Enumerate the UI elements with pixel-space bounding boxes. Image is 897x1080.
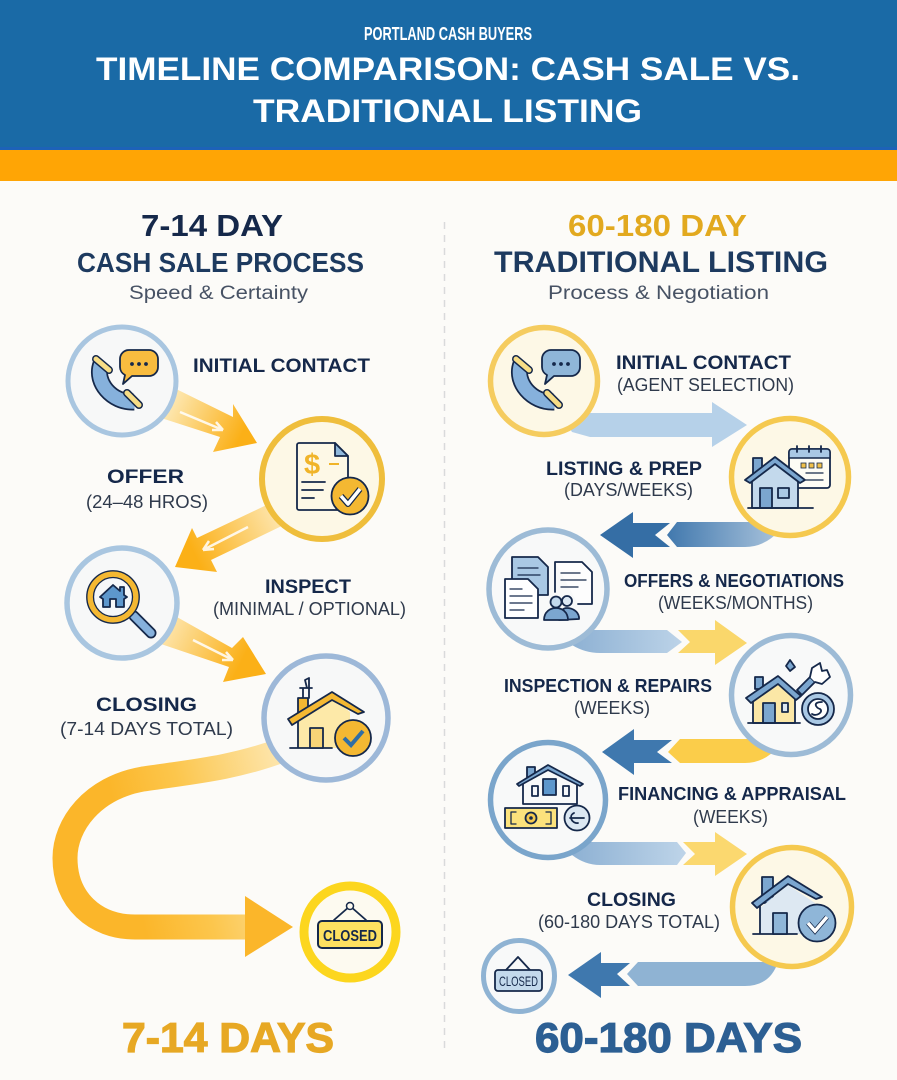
label: closing	[60, 694, 233, 739]
label: financing and appraisal: (WEEKS)	[693, 807, 768, 827]
heading: traditional listing: Process & Negotiation	[548, 283, 769, 304]
label: offer: (24–48 HROS)	[86, 492, 208, 512]
icon circle: closed sign	[484, 940, 554, 1012]
label: inspection and repairs: INSPECTION & REPAIRS	[504, 675, 712, 696]
heading: cash sale: 7-14 DAY	[141, 208, 283, 243]
main title	[96, 51, 800, 129]
total: 7-14 days: 7-14 DAYS	[122, 1014, 334, 1061]
label: inspection and repairs	[504, 675, 712, 718]
label: closing: (60-180 DAYS TOTAL)	[538, 912, 720, 932]
label: inspect: INSPECT	[265, 576, 351, 598]
icon circle: closed sign: CLOSED	[323, 928, 377, 945]
brand name: PORTLAND CASH BUYERS	[364, 24, 532, 44]
label: offers and negotiations: (WEEKS/MONTHS)	[658, 593, 813, 613]
icon circle: phone	[490, 328, 598, 434]
label: listing and prep: LISTING & PREP	[546, 458, 702, 480]
icon circle: house with tools	[732, 636, 850, 754]
arrow: financing to closing	[570, 832, 747, 876]
icon circle: magnifier with house	[67, 548, 177, 658]
heading: traditional listing: TRADITIONAL LISTING	[494, 246, 828, 279]
arrow: inspection to financing	[602, 729, 780, 775]
step: closing	[60, 656, 388, 780]
heading: traditional listing	[494, 208, 828, 304]
heading: cash sale: Speed & Certainty	[129, 283, 309, 304]
arrow: offers to inspection	[570, 620, 747, 665]
label: inspect: (MINIMAL / OPTIONAL)	[213, 599, 406, 619]
step: inspection and repairs	[504, 636, 850, 754]
center divider	[444, 222, 446, 1050]
main title: TIMELINE COMPARISON: CASH SALE VS.	[96, 51, 800, 87]
step: listing and prep	[546, 418, 848, 536]
panel: traditional listing	[484, 208, 852, 1061]
label: offer: OFFER	[107, 466, 184, 488]
label: initial contact: (AGENT SELECTION)	[617, 375, 794, 395]
label: inspection and repairs: (WEEKS)	[574, 698, 650, 718]
icon circle: house with check	[264, 656, 388, 780]
label: offer	[86, 466, 208, 512]
label: financing and appraisal: FINANCING & APPRAISAL	[618, 783, 846, 804]
step: initial contact	[68, 327, 370, 435]
label: closing	[538, 889, 720, 932]
label: inspect	[213, 576, 406, 619]
label: initial contact: INITIAL CONTACT	[193, 355, 370, 377]
icon circle: house and calendar	[732, 418, 848, 536]
icon circle: house and money	[490, 742, 606, 858]
heading: traditional listing: 60-180 DAY	[568, 208, 747, 243]
arrow: offer to inspect	[175, 501, 290, 572]
label: listing and prep: (DAYS/WEEKS)	[564, 480, 693, 500]
heading: cash sale	[77, 208, 364, 304]
step: offer	[86, 419, 382, 539]
label: closing: (7-14 DAYS TOTAL)	[60, 719, 233, 739]
step: financing and appraisal	[490, 742, 846, 858]
step: inspect	[67, 548, 406, 658]
heading: cash sale: CASH SALE PROCESS	[77, 247, 364, 278]
label: listing and prep	[546, 458, 702, 500]
label: closing: CLOSING	[587, 889, 676, 911]
arrow: inspect to closing	[155, 612, 266, 682]
label: initial contact	[616, 352, 794, 395]
step: initial contact (agent selection)	[490, 328, 794, 434]
icon circle: offer document	[262, 419, 382, 539]
icon circle: phone	[68, 327, 176, 435]
curved arrow: closing to closed	[65, 750, 293, 957]
step: closing	[538, 848, 852, 966]
panel: cash sale process	[60, 208, 406, 1061]
main title: TRADITIONAL LISTING	[253, 93, 642, 129]
header banner	[0, 0, 897, 181]
label: offers and negotiations	[624, 570, 844, 613]
icon circle: closed sign	[304, 886, 396, 978]
arrow: listing to offers	[600, 512, 780, 558]
label: initial contact: INITIAL CONTACT	[616, 352, 791, 374]
step: offers and negotiations	[489, 530, 844, 648]
arrow: contact to listing	[560, 402, 747, 447]
arrow: contact to offer	[155, 386, 257, 452]
label: financing and appraisal	[618, 783, 846, 827]
icon circle: house with check	[732, 848, 852, 966]
arrow: closing to closed	[568, 952, 778, 998]
icon circle: offer document: $	[304, 449, 320, 481]
icon circle: closed sign: CLOSED	[499, 973, 538, 989]
label: offers and negotiations: OFFERS & NEGOTIATIONS	[624, 570, 844, 591]
label: closing: CLOSING	[96, 694, 197, 716]
total: 60-180 days: 60-180 DAYS	[535, 1014, 802, 1061]
icon circle: documents and people	[489, 530, 607, 648]
